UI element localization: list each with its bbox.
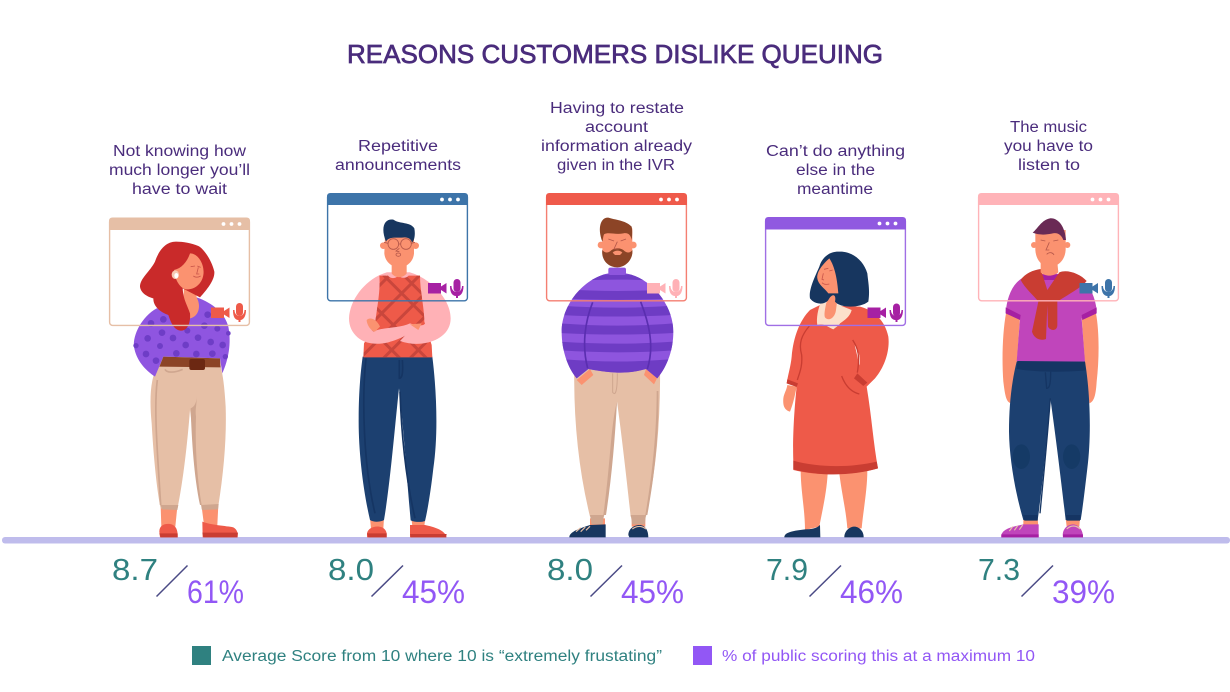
figure: woman in red dress <box>783 252 889 537</box>
figure: man in argyle vest <box>349 220 451 537</box>
icons: camera and microphone <box>647 279 682 298</box>
score: 7.3 over 39%: 39% <box>1052 574 1115 610</box>
panel: can't do anything else <box>765 143 906 610</box>
title: REASONS CUSTOMERS DISLIKE QUEUING <box>347 39 883 69</box>
reason text: Repetitive <box>358 138 438 155</box>
reason text <box>109 143 250 198</box>
reason text: Can’t do anything <box>766 143 905 160</box>
reason text: meantime <box>797 181 873 198</box>
reason text: you have to <box>1004 138 1093 155</box>
ground line <box>2 537 1230 544</box>
video window <box>978 193 1119 301</box>
reason text <box>541 100 692 174</box>
score: 8.7 over 61%: 61% <box>187 574 244 610</box>
icons: camera and microphone <box>868 304 903 322</box>
reason text: Having to restate <box>550 100 684 117</box>
panel: the music you have to listen to <box>978 119 1119 610</box>
video window <box>109 218 250 325</box>
reason text: have to wait <box>132 181 228 198</box>
score: 8.0 over 45%: 8.0 <box>547 552 593 587</box>
panel: repetitive announcements <box>327 138 468 610</box>
figure: bearded man in striped sweater <box>560 218 673 537</box>
reason text: The music <box>1010 119 1087 136</box>
reason text: given in the IVR <box>557 157 675 174</box>
score: 7.9 over 46%: 46% <box>840 574 903 610</box>
score: 8.7 over 61%: 8.7 <box>112 552 158 587</box>
score: 8.0 over 45%: 45% <box>621 574 684 610</box>
reason text: else in the <box>796 162 875 179</box>
reason text <box>335 138 461 174</box>
reason text: announcements <box>335 157 461 174</box>
panel: having to restate account information <box>541 100 692 610</box>
video window <box>546 193 687 301</box>
score: 7.9 over 46% <box>766 552 903 610</box>
score: 8.0 over 45%: 45% <box>402 574 465 610</box>
score: 7.3 over 39%: 7.3 <box>978 552 1020 587</box>
reason text: information already <box>541 138 692 155</box>
legend <box>192 646 1035 665</box>
video window <box>765 217 906 325</box>
panel: not knowing how much longer <box>109 143 250 610</box>
figure: woman with red hair <box>133 242 238 537</box>
figure: man with sweater on shoulders <box>1001 218 1099 537</box>
video window <box>327 193 468 301</box>
icons: camera and microphone <box>428 279 464 298</box>
reason text: Not knowing how <box>113 143 247 160</box>
score: 8.7 over 61% <box>112 552 244 610</box>
reason text: account <box>585 119 649 136</box>
score: 7.3 over 39% <box>978 552 1115 610</box>
score: 8.0 over 45% <box>328 552 465 610</box>
icons: camera and microphone <box>1080 279 1115 298</box>
reason text: much longer you’ll <box>109 162 250 179</box>
reason text <box>766 143 905 198</box>
score: 8.0 over 45% <box>547 552 684 610</box>
legend item: percent scoring maximum: % of public scoring this at a maximum 10 <box>722 648 1035 665</box>
score: 8.0 over 45%: 8.0 <box>328 552 374 587</box>
reason text <box>1004 119 1093 174</box>
legend item: average score: Average Score from 10 where 10 is “extremely frustating” <box>222 648 662 665</box>
score: 7.9 over 46%: 7.9 <box>766 552 808 587</box>
icons: camera and microphone <box>211 303 246 322</box>
reason text: listen to <box>1018 157 1080 174</box>
